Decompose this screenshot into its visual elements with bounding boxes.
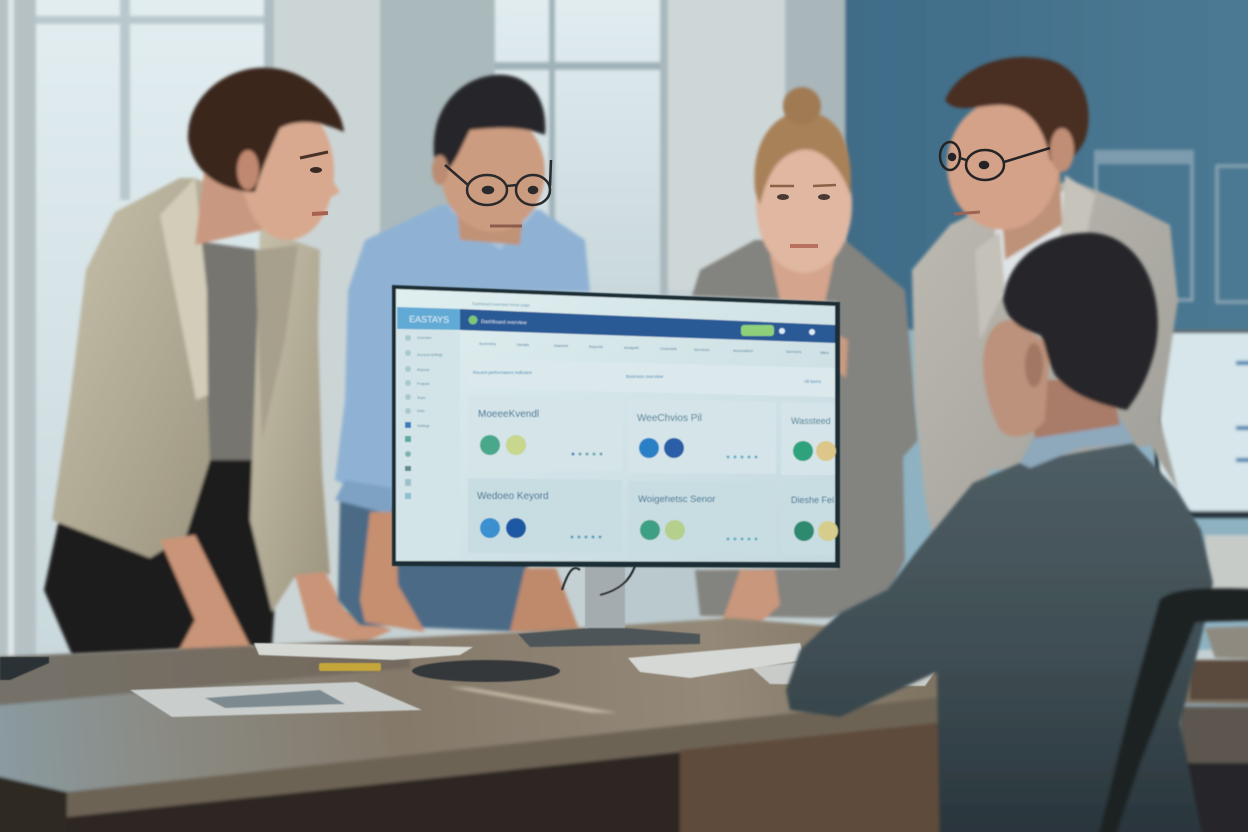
- header title: Dashboard overview: [481, 319, 527, 326]
- summary panel: [468, 359, 835, 397]
- monitor stand: [518, 566, 700, 647]
- person: woman in beige blazer: [44, 68, 392, 658]
- nav row: Details: [517, 342, 529, 347]
- summary text: All items: [804, 379, 822, 384]
- right background monitor: [1155, 330, 1248, 595]
- header badge: [468, 316, 478, 324]
- nav row: Services: [786, 349, 801, 354]
- dashboard logo text: EASTAYS: [409, 314, 449, 325]
- person: man in blue shirt with glasses: [335, 75, 590, 632]
- summary text: Recent performance indicator: [473, 370, 533, 375]
- face details of woman in cardigan: [770, 185, 836, 246]
- dashboard logo tile: [397, 307, 460, 330]
- table items: papers, phone, mouse, keyboard: [0, 643, 935, 717]
- sidebar items: Settings: [417, 424, 430, 428]
- card 1: MoeeeKvendl: [478, 409, 539, 420]
- nav row: Summary: [479, 341, 496, 346]
- monitor with dashboard: [392, 285, 840, 568]
- sidebar: [397, 329, 460, 558]
- card 3: Wassteed: [791, 416, 831, 426]
- nav row: Markets: [554, 343, 568, 348]
- card 5: [628, 481, 776, 554]
- sidebar items: [405, 335, 443, 499]
- sidebar items: Team: [417, 396, 426, 400]
- summary text: [473, 370, 822, 384]
- person: woman in grey cardigan: [692, 87, 918, 632]
- nav row: Reports: [589, 344, 603, 349]
- person: man in grey jacket with glasses: [912, 57, 1178, 545]
- face details and glasses of man in grey jacket: [940, 142, 1050, 214]
- header green button: [741, 325, 774, 336]
- card 1: [468, 395, 622, 471]
- sidebar items: Reports: [417, 368, 430, 372]
- face details and glasses of man in blue shirt: [445, 160, 551, 226]
- sidebar items: Data: [417, 409, 424, 413]
- dashboard top URL bar text: Dashboard overview home page: [472, 301, 530, 308]
- sidebar items: Account settings: [417, 353, 443, 357]
- nav row: Sites: [820, 350, 829, 355]
- nav row: Automation: [733, 348, 753, 353]
- nav row: Channels: [660, 346, 677, 351]
- card 6: Dieshe Fei: [791, 495, 834, 505]
- monitor screen: [396, 289, 835, 562]
- nav row: Analysis: [624, 345, 639, 350]
- card 6: [781, 482, 838, 555]
- card 5: Woigehetsc Senor: [638, 494, 715, 505]
- face details of woman in blazer: [300, 152, 328, 214]
- office chair: [1093, 588, 1248, 832]
- card 3: [781, 402, 836, 475]
- nav row: Services: [694, 347, 709, 352]
- card 4: [468, 478, 622, 553]
- summary text: Business overview: [626, 374, 664, 379]
- sidebar items: Overview: [417, 336, 432, 340]
- card 4: Wedoeo Keyord: [477, 491, 549, 502]
- table: [0, 618, 1248, 832]
- person: seated man in dark jacket, seen from behind: [786, 233, 1213, 832]
- card 2: [628, 399, 776, 474]
- card 2: WeeChvios Pil: [637, 413, 702, 424]
- sidebar items: Projects: [417, 382, 430, 386]
- nav row: [479, 341, 829, 355]
- monitor bezel: [392, 285, 840, 568]
- header status dots: [779, 328, 815, 335]
- dashboard header bar: [460, 309, 835, 343]
